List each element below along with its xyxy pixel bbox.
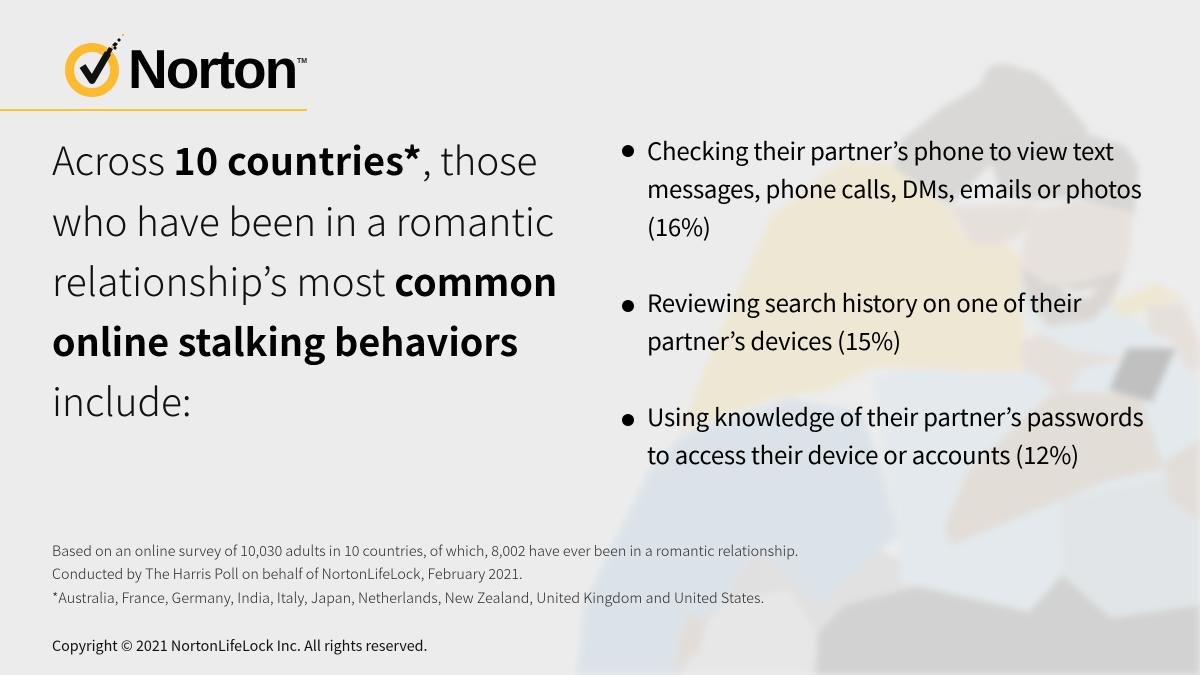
woman's hand on shoulder — [1146, 303, 1200, 373]
man's forearm and hands — [944, 392, 1164, 545]
bullet: search history 15% — [622, 284, 1082, 357]
survey footnote: Based on an online survey of 10,030 adults in 10 countries, of which, 8,002 have ever been in a romantic relationship. — [52, 540, 798, 561]
wordmark: Norton — [128, 38, 296, 100]
bullet: passwords 12%: Using knowledge of their partner’s passwords — [647, 398, 1143, 433]
bullet: checking phone 16%: Checking their partner’s phone to view text — [647, 132, 1114, 167]
pointing hand — [1021, 333, 1123, 398]
man's shirt — [874, 275, 1200, 618]
man's hair — [991, 133, 1139, 217]
survey footnote — [52, 540, 798, 608]
survey footnote: Conducted by The Harris Poll on behalf of NortonLifeLock, February 2021. — [52, 563, 523, 584]
bullet: passwords 12%: to access their device or accounts (12%) — [647, 436, 1079, 471]
sock and foot — [680, 590, 822, 675]
logo: Norton — [65, 34, 307, 100]
heading text: include: — [52, 372, 192, 428]
survey footnote: *Australia, France, Germany, India, Italy, Japan, Netherlands, New Zealand, United Kingdom and United States. — [52, 587, 764, 608]
woman's face — [950, 203, 1036, 245]
bullet: checking phone 16% — [622, 132, 1142, 243]
phone — [1109, 348, 1176, 402]
copyright: Copyright © 2021 NortonLifeLock Inc. All rights reserved. — [52, 635, 428, 656]
heading text: relationship’s most common — [52, 252, 557, 308]
yellow sweater — [680, 160, 1030, 432]
woman's hair — [894, 63, 1090, 205]
lower grey floor — [640, 520, 1200, 675]
bullet: passwords 12% — [622, 398, 1143, 471]
man's face — [1019, 200, 1132, 326]
icon: yellow ring with check mark — [65, 34, 124, 97]
bullet: search history 15%: partner’s devices (15%) — [647, 322, 901, 357]
heading text: Across 10 countries*, those — [52, 131, 537, 187]
bullet: search history 15%: Reviewing search history on one of their — [647, 284, 1081, 319]
bullet: checking phone 16%: messages, phone calls, DMs, emails or photos — [647, 170, 1142, 205]
jeans — [576, 398, 899, 675]
trademark: TM — [297, 58, 307, 65]
dark pants — [817, 575, 1200, 675]
yellow divider under logo — [0, 109, 307, 111]
bullet: checking phone 16%: (16%) — [647, 208, 711, 243]
heading text — [52, 131, 557, 428]
heading text: online stalking behaviors — [52, 312, 518, 367]
heading text: who have been in a romantic — [52, 192, 554, 248]
